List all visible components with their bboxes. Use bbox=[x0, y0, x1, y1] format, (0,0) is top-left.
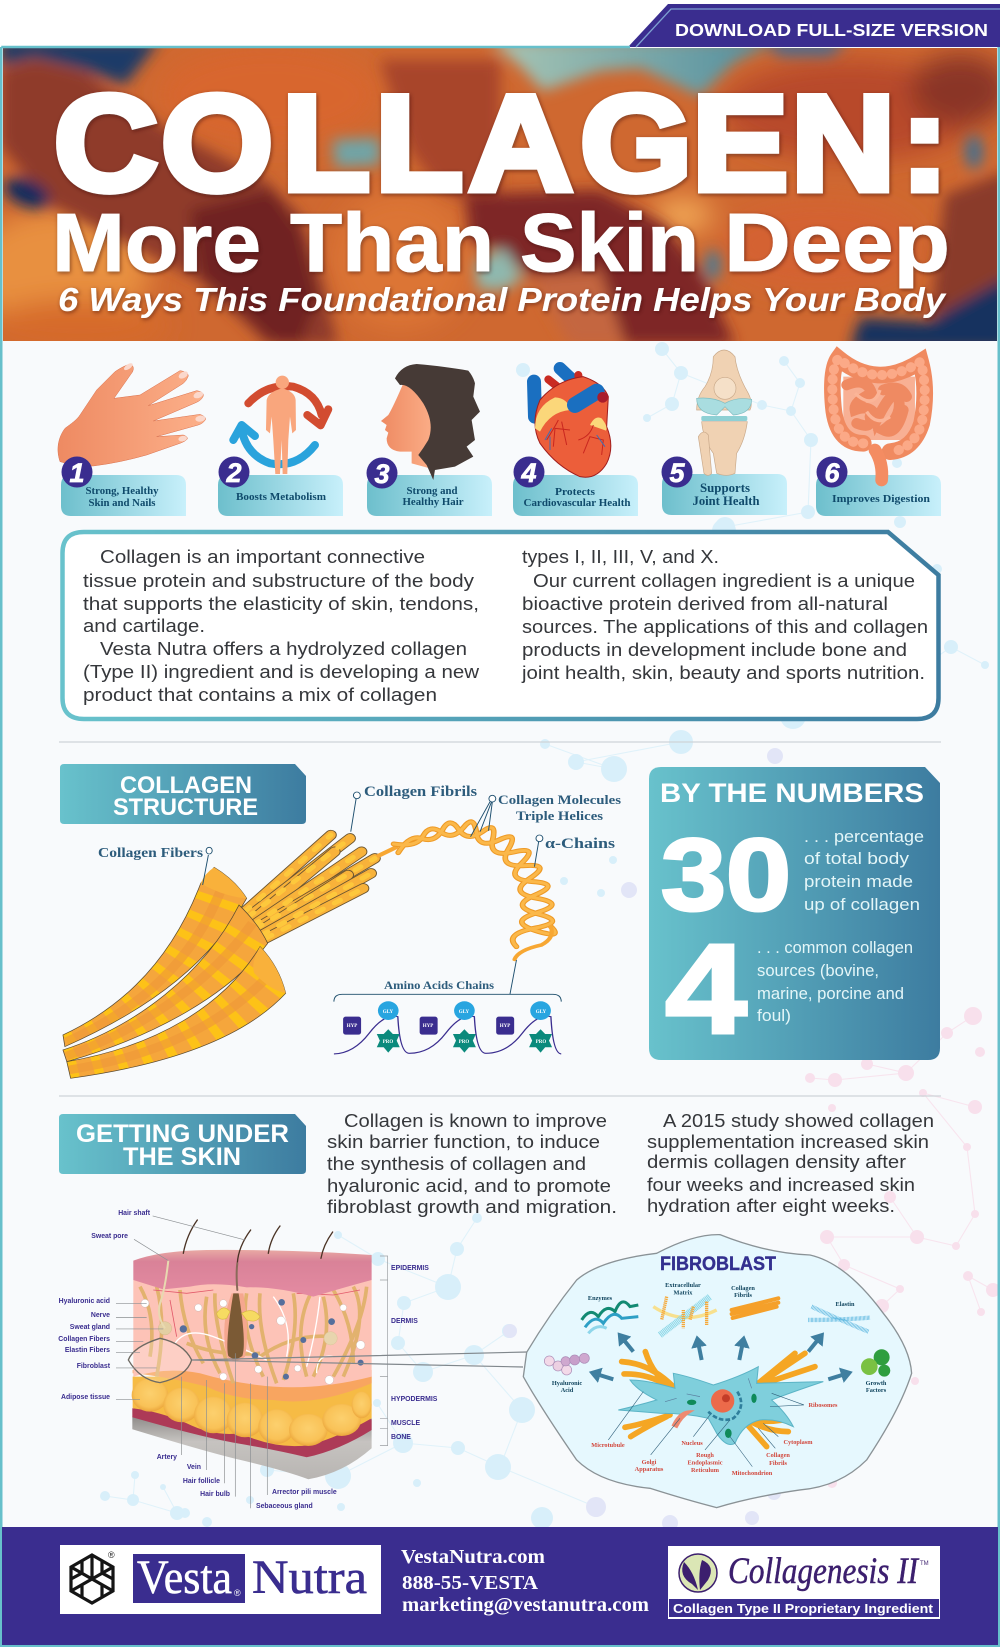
skin diagram labels: Fibroblast bbox=[77, 1363, 111, 1370]
fibroblast labels: Ribosomes bbox=[808, 1402, 838, 1409]
icon: hand bbox=[58, 362, 206, 466]
icon: metabolism cycle bbox=[233, 376, 328, 474]
label: collagen fibers: Collagen Fibers bbox=[98, 846, 204, 861]
benefit label text bbox=[86, 481, 930, 509]
skin diagram labels: BONE bbox=[391, 1434, 411, 1441]
label: collagen molecules bbox=[498, 792, 621, 823]
heading: collagen structure: COLLAGEN bbox=[120, 772, 252, 799]
amino acid tags: HYP bbox=[347, 1024, 357, 1029]
label 1: Skin and Nails bbox=[88, 498, 156, 509]
stat 30 caption: . . . percentage bbox=[804, 827, 924, 846]
stat 4 caption: . . . common collagen bbox=[757, 938, 913, 957]
intro text panel bbox=[62, 532, 938, 719]
label 1: Strong, Healthy bbox=[86, 486, 159, 497]
icon: intestines bbox=[832, 358, 925, 480]
text block: skin barrier: Collagen is known to improve bbox=[344, 1111, 607, 1131]
skin diagram labels: Elastin Fibers bbox=[65, 1347, 110, 1354]
skin diagram labels: Arrector pili muscle bbox=[272, 1489, 337, 1496]
fibroblast labels: Endoplasmic bbox=[688, 1460, 723, 1466]
fibroblast labels: Apparatus bbox=[635, 1466, 664, 1473]
stat 4 caption bbox=[757, 938, 913, 1025]
intro left column: tissue protein and substructure of the body bbox=[83, 571, 474, 591]
badge 1: 1 bbox=[69, 458, 85, 488]
intro right column: bioactive protein derived from all-natural bbox=[522, 594, 888, 614]
secretion arrows bbox=[595, 1337, 847, 1379]
fibroblast blob outline bbox=[523, 1235, 912, 1508]
intro right column: joint health, skin, beauty and sports nutrition. bbox=[521, 663, 925, 683]
fibrils bundle bbox=[245, 835, 375, 938]
fibroblast labels: Microtubule bbox=[591, 1442, 625, 1449]
stat 30 caption: protein made bbox=[804, 872, 913, 891]
fibroblast labels: Nucleus bbox=[681, 1440, 703, 1447]
vesta nutra logo: Nutra bbox=[252, 1551, 367, 1604]
hair follicle and gland bbox=[217, 1293, 260, 1361]
stat 4 caption: foul) bbox=[757, 1006, 791, 1025]
cell body bbox=[618, 1367, 823, 1445]
vesta nutra logo bbox=[60, 1545, 381, 1614]
panel: by the numbers bbox=[649, 767, 940, 1061]
footer band bbox=[2, 1527, 998, 1645]
text block: 2015 study: A 2015 study showed collagen bbox=[663, 1111, 934, 1131]
structure labels bbox=[98, 784, 621, 992]
fibroblast labels: Collagen bbox=[731, 1285, 755, 1292]
collagenesis logo: Collagen Type II Proprietary Ingredient bbox=[673, 1601, 934, 1616]
stat 30 caption: of total body bbox=[804, 849, 910, 868]
collagen fibrils bundle bbox=[732, 1298, 778, 1318]
skin diagram labels: Sebaceous gland bbox=[256, 1503, 313, 1510]
fibroblast labels: Mitochondrion bbox=[732, 1470, 773, 1477]
label 4 bbox=[524, 487, 631, 509]
amino acid tags bbox=[347, 1010, 547, 1045]
text block: skin barrier bbox=[327, 1111, 617, 1217]
intro left column: product that contains a mix of collagen bbox=[83, 685, 437, 705]
part leader lines bbox=[608, 1392, 804, 1467]
main title: COLLAGEN: bbox=[54, 67, 949, 219]
left maroon tube bbox=[0, 60, 338, 345]
leader lines bbox=[203, 792, 543, 994]
hyaluronic acid bbox=[544, 1353, 589, 1375]
top teal sky bbox=[490, 40, 780, 96]
heading: collagen structure: STRUCTURE bbox=[113, 794, 258, 821]
label box 6 bbox=[816, 475, 941, 516]
amino acid tags: PRO bbox=[536, 1040, 546, 1045]
label: amino acids: Amino Acids Chains bbox=[384, 978, 494, 992]
skin diagram labels: Vein bbox=[187, 1464, 201, 1471]
subtitle: Than bbox=[290, 196, 494, 289]
intro left column: (Type II) ingredient and is developing a new bbox=[83, 662, 480, 682]
label 4: Cardiovascular Health bbox=[524, 498, 631, 509]
amino acid chain bbox=[334, 994, 561, 1054]
skin diagram labels: EPIDERMIS bbox=[391, 1265, 429, 1272]
fibroblast labels: Factors bbox=[866, 1387, 887, 1394]
label: collagen molecules: Collagen Molecules bbox=[498, 792, 621, 807]
text block: skin barrier: fibroblast growth and migration. bbox=[327, 1197, 617, 1217]
label 3: Healthy Hair bbox=[402, 497, 464, 508]
label 5 bbox=[692, 481, 760, 508]
badge 5 bbox=[662, 456, 692, 488]
main title bbox=[52, 67, 950, 318]
fibroblast labels: Rough bbox=[696, 1452, 714, 1459]
muscle layer bbox=[132, 1408, 372, 1457]
enzymes bbox=[582, 1302, 638, 1333]
contact details: 888-55-VESTA bbox=[402, 1572, 539, 1594]
fibroblast labels: Matrix bbox=[674, 1290, 693, 1296]
label: collagen fibrils: Collagen Fibrils bbox=[364, 784, 477, 800]
pale teal patch lower center bbox=[475, 248, 523, 290]
heading: collagen structure bbox=[60, 764, 306, 824]
lower-right navy bbox=[850, 268, 1000, 350]
label 3: Strong and bbox=[406, 486, 458, 497]
fibroblast labels: Fibrils bbox=[769, 1460, 787, 1467]
skin diagram labels: Artery bbox=[157, 1454, 177, 1461]
orange collagen bundles bbox=[622, 1352, 815, 1447]
bone layer bbox=[132, 1417, 372, 1479]
fibroblast labels: Collagen bbox=[766, 1452, 790, 1459]
fibroblast labels: Golgi bbox=[642, 1459, 657, 1466]
badge 6 bbox=[816, 456, 848, 488]
fibroblast labels: Extracellular bbox=[665, 1282, 701, 1289]
leader lines bbox=[116, 1216, 388, 1508]
download label: DOWNLOAD FULL-SIZE VERSION bbox=[675, 20, 988, 40]
label 5: Joint Health bbox=[692, 494, 760, 508]
label 5: Supports bbox=[700, 481, 750, 495]
intro right column: Our current collagen ingredient is a unique bbox=[533, 571, 915, 591]
label box 4 bbox=[513, 475, 638, 516]
skin diagram labels: Hair shaft bbox=[118, 1210, 151, 1217]
fibroblast labels: Fibrils bbox=[734, 1292, 752, 1299]
skin diagram labels: DERMIS bbox=[391, 1318, 418, 1325]
text block: 2015 study: supplementation increased skin bbox=[647, 1132, 929, 1152]
label: collagen molecules: Triple Helices bbox=[516, 808, 603, 823]
intro left column: Vesta Nutra offers a hydrolyzed collagen bbox=[100, 639, 467, 659]
skin diagram labels: Hair bulb bbox=[200, 1491, 230, 1498]
text block: skin barrier: hyaluronic acid, and to promote bbox=[327, 1176, 611, 1196]
collagen structure diagram bbox=[63, 792, 561, 1078]
intro right column: types I, II, III, V, and X. bbox=[522, 547, 719, 567]
badge 4: 4 bbox=[520, 458, 537, 488]
skin diagram labels bbox=[58, 1210, 438, 1510]
skin diagram labels: Collagen Fibers bbox=[58, 1336, 110, 1343]
stat 30 caption: up of collagen bbox=[804, 895, 920, 914]
subtitle: More bbox=[52, 196, 261, 289]
contact details: marketing@vestanutra.com bbox=[402, 1594, 649, 1616]
amino acid tags: GLY bbox=[383, 1010, 394, 1015]
subtitle: Deep bbox=[724, 196, 950, 289]
fibroblast labels: Reticulum bbox=[691, 1467, 720, 1474]
collagenesis logo bbox=[668, 1546, 940, 1619]
text block: skin barrier: skin barrier function, to induce bbox=[327, 1132, 600, 1152]
badge 1 bbox=[62, 456, 92, 488]
skin diagram labels: Hair follicle bbox=[183, 1478, 220, 1485]
collagenesis logo: Collagenesis II bbox=[728, 1551, 919, 1592]
elastin bbox=[808, 1307, 870, 1332]
badge 3 bbox=[366, 458, 398, 489]
intro right column: products in development include bone and bbox=[522, 640, 907, 660]
icon: hexagon mark bbox=[71, 1555, 113, 1603]
label 3 bbox=[402, 486, 464, 508]
label 4: Protects bbox=[555, 487, 595, 498]
intro right column: sources. The applications of this and collagen bbox=[522, 617, 928, 637]
text block: 2015 study: four weeks and increased skin bbox=[647, 1175, 915, 1195]
amino acid tags: HYP bbox=[500, 1024, 510, 1029]
intro right column bbox=[521, 547, 928, 683]
connector from skin to fibroblast bbox=[192, 1352, 527, 1367]
fibroblast labels: Cytoplasm bbox=[783, 1439, 813, 1446]
fibroblast callout loop bbox=[128, 1338, 192, 1383]
dermis layer bbox=[133, 1280, 372, 1387]
label box 5 bbox=[662, 474, 787, 515]
fibroblast labels: Acid bbox=[561, 1387, 574, 1394]
badge 3: 3 bbox=[374, 459, 390, 489]
growth factors bbox=[861, 1349, 890, 1377]
hypodermis layer bbox=[132, 1370, 372, 1446]
number badges bbox=[62, 456, 848, 489]
badge 2 bbox=[218, 456, 250, 488]
center-right maroon diagonal bbox=[465, 190, 735, 345]
skin diagram labels: Sweat pore bbox=[91, 1233, 128, 1240]
upper center tube bbox=[380, 60, 500, 215]
text block: skin barrier: the synthesis of collagen and bbox=[327, 1154, 586, 1174]
vesta nutra logo: Vesta bbox=[137, 1551, 232, 1604]
hero banner with collagen background bbox=[0, 40, 1000, 351]
vesta nutra logo: ® bbox=[234, 1588, 241, 1598]
label 2: Boosts Metabolism bbox=[236, 492, 326, 503]
fibroblast diagram bbox=[523, 1235, 912, 1508]
badge 6: 6 bbox=[824, 458, 840, 488]
extracellular matrix bbox=[653, 1297, 717, 1335]
label box 2 bbox=[218, 475, 343, 516]
background molecule pattern: blue and pink nodes bbox=[100, 342, 1000, 1531]
text block: 2015 study bbox=[647, 1111, 934, 1216]
label 6: Improves Digestion bbox=[832, 494, 930, 505]
skin cross-section diagram bbox=[116, 1216, 388, 1508]
icon: knee joint bbox=[697, 350, 752, 475]
stat 4 caption: marine, porcine and bbox=[757, 984, 904, 1003]
fibroblast labels: Enzymes bbox=[588, 1295, 613, 1302]
fibroblast title: FIBROBLAST bbox=[660, 1254, 776, 1275]
sweat gland duct bbox=[159, 1261, 168, 1328]
amino acid tags: HYP bbox=[423, 1024, 433, 1029]
top-left navy bbox=[0, 40, 160, 85]
download tab bbox=[628, 4, 1000, 47]
fiber bundles bbox=[63, 867, 286, 1078]
label box 1 bbox=[61, 475, 186, 516]
skin diagram labels: MUSCLE bbox=[391, 1420, 420, 1427]
epidermis layer bbox=[133, 1250, 372, 1297]
icon: heart bbox=[534, 368, 611, 477]
stat: 4: 4 bbox=[665, 918, 747, 1061]
text block: 2015 study: hydration after eight weeks. bbox=[647, 1196, 895, 1216]
badge 5: 5 bbox=[669, 458, 685, 488]
text block: 2015 study: dermis collagen density after bbox=[647, 1152, 906, 1172]
collagenesis logo: TM bbox=[920, 1561, 929, 1567]
heading: getting under the skin: THE SKIN bbox=[123, 1143, 241, 1171]
amino acid tags: GLY bbox=[536, 1010, 547, 1015]
icon: hair profile bbox=[381, 364, 480, 480]
fibroblast labels: Elastin bbox=[836, 1301, 855, 1308]
contact details bbox=[401, 1546, 649, 1616]
skin diagram labels: Hyaluronic acid bbox=[59, 1298, 110, 1305]
fibroblast labels: Hyaluronic bbox=[552, 1380, 582, 1387]
numbers heading: BY THE NUMBERS bbox=[660, 778, 924, 808]
skin diagram labels: Sweat gland bbox=[70, 1324, 110, 1331]
skin diagram labels: HYPODERMIS bbox=[391, 1396, 438, 1403]
badge 2: 2 bbox=[225, 458, 242, 488]
intro left column: and cartilage. bbox=[83, 616, 205, 636]
fibroblast labels: Growth bbox=[866, 1380, 887, 1387]
amino acid tags: PRO bbox=[459, 1040, 469, 1045]
intro left column: that supports the elasticity of skin, tendons, bbox=[83, 594, 479, 614]
intro left column bbox=[83, 547, 480, 705]
stat: 30: 30 bbox=[661, 818, 791, 932]
stat 4 caption: sources (bovine, bbox=[757, 961, 879, 980]
benefit labels panel bbox=[61, 474, 941, 516]
label 1 bbox=[86, 486, 159, 509]
heading: getting under the skin: GETTING UNDER bbox=[76, 1120, 289, 1148]
heading: getting under the skin bbox=[59, 1114, 306, 1174]
cell organelles bbox=[665, 1378, 757, 1438]
amino acid tags: GLY bbox=[459, 1010, 470, 1015]
hair strands bbox=[183, 1220, 333, 1290]
intro left column: Collagen is an important connective bbox=[100, 547, 425, 567]
tagline: 6 Ways This Foundational Protein Helps Your Body bbox=[58, 281, 947, 318]
helix coil bbox=[379, 822, 555, 959]
skin diagram labels: Adipose tissue bbox=[61, 1394, 110, 1401]
amino acid tags: PRO bbox=[383, 1040, 393, 1045]
label box 3 bbox=[367, 475, 492, 516]
stat 30 caption bbox=[804, 827, 924, 914]
label: alpha chains: α-Chains bbox=[545, 836, 615, 852]
contact details: VestaNutra.com bbox=[401, 1546, 545, 1568]
vesta nutra logo: ® bbox=[108, 1550, 115, 1560]
badge 4 bbox=[514, 456, 544, 488]
teal spots bbox=[333, 138, 380, 167]
fibroblast labels bbox=[552, 1282, 887, 1477]
subtitle: Skin bbox=[520, 196, 699, 289]
skin diagram labels: Nerve bbox=[91, 1312, 110, 1319]
